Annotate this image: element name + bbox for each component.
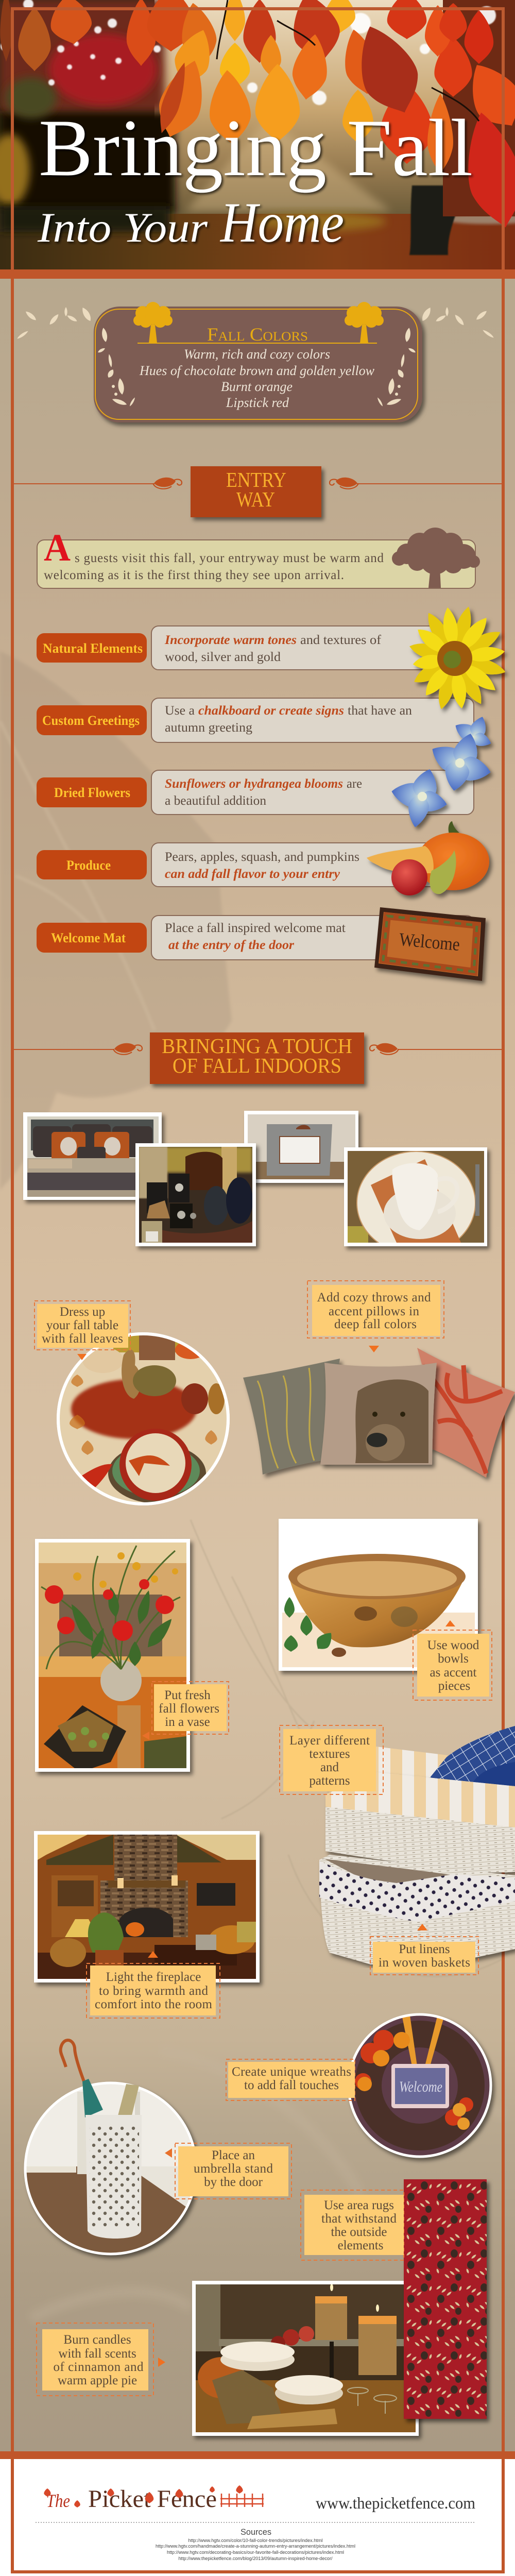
row: natural elements: Incorporate warm tones — [164, 633, 297, 647]
callout: area rugs: that withstand — [321, 2212, 397, 2226]
callout: fresh fall flowers — [142, 1682, 229, 1740]
photo: throw pillows — [243, 1348, 515, 1478]
row: natural elements: wood, silver and gold — [165, 650, 281, 664]
logo: The — [46, 2490, 70, 2511]
icon: welcome mat — [374, 907, 486, 981]
panel text: Lipstick red — [226, 395, 289, 410]
title: Bringing Fall — [39, 103, 473, 193]
panel text: Burnt orange — [221, 379, 293, 394]
photo: fall table setting — [57, 1332, 230, 1505]
row: dried flowers — [37, 770, 474, 815]
photo: area rug — [404, 2179, 487, 2419]
hero background: sunlit clearing — [0, 0, 515, 269]
icon: pumpkin, squash, apple, pear — [367, 821, 489, 895]
photo: mug on plate — [344, 1147, 487, 1255]
callout: umbrella stand: by the door — [204, 2175, 263, 2189]
callout: candles: Burn candles — [63, 2333, 131, 2347]
section heading: bringing a touch of fall indoors — [14, 1032, 502, 1084]
callout: cozy throws and pillows: accent pillows in — [329, 1304, 419, 1318]
callout: layer textures: and — [320, 1760, 339, 1774]
intro text box — [37, 527, 480, 588]
row: produce: Produce — [66, 858, 111, 873]
panel text: Warm, rich and cozy colors — [184, 347, 330, 362]
cream leaf garland — [16, 306, 494, 340]
umbrella and stand — [61, 2040, 142, 2239]
row: dried flowers: Dried Flowers — [54, 785, 130, 800]
top basket — [325, 1772, 515, 1872]
icon: brown oak tree — [392, 528, 480, 588]
callout: wood bowls: bowls — [438, 1652, 469, 1666]
callout: area rugs: elements — [338, 2239, 383, 2252]
callout: layer textures: Layer different — [289, 1734, 370, 1748]
callout: wood bowls: Use wood — [427, 1638, 479, 1652]
panel text — [139, 347, 375, 410]
section heading: bringing a touch of fall indoors: BRINGING A TOUCH — [162, 1034, 352, 1058]
callout: dress up your fall table — [35, 1301, 130, 1360]
bottom basket — [319, 1855, 515, 1964]
callout: wood bowls — [413, 1620, 492, 1700]
photo: woven baskets with linens — [319, 1726, 515, 1964]
row: welcome mat: Place a fall inspired welcome mat — [165, 921, 346, 935]
sources — [156, 2527, 355, 2562]
section heading: entry way — [14, 466, 502, 517]
row: dried flowers: a beautiful addition — [165, 794, 267, 808]
callout: cozy throws and pillows — [307, 1281, 444, 1352]
row: custom greetings: chalkboard or create signs — [198, 704, 344, 718]
callout: fresh fall flowers: fall flowers — [159, 1702, 219, 1716]
row: produce: Pears, apples, squash, and pumpkins — [165, 850, 359, 864]
intro text box: welcoming as it is the first thing they see upon arrival. — [44, 568, 344, 582]
callout: area rugs — [301, 2190, 404, 2260]
sources: http://www.hgtv.com/decorating-basics/our-favorite-fall-decorations/pictures/index.html — [167, 2550, 344, 2555]
callout: layer textures: textures — [309, 1747, 350, 1761]
cream leaves inside panel — [97, 327, 416, 407]
icon: golden tree left — [133, 302, 173, 343]
callout: layer textures: patterns — [309, 1774, 350, 1788]
icon: golden tree right — [345, 302, 384, 343]
callout: umbrella stand — [165, 2143, 291, 2199]
section heading: entry way: WAY — [236, 487, 275, 511]
callout: light the fireplace: Light the fireplace — [106, 1970, 201, 1984]
sources: http://www.hgtv.com/color/10-fall-color-trends/pictures/index.html — [188, 2538, 322, 2544]
panel: fall colors — [16, 302, 494, 422]
sources: http://www.thepicketfence.com/blog/2013/09/autumn-inspired-home-decor/ — [178, 2556, 333, 2562]
icon: sunflower — [408, 605, 507, 711]
callout: dress up your fall table: Dress up — [60, 1305, 105, 1319]
logo: Picket Fence — [88, 2485, 217, 2513]
hero branches — [217, 0, 479, 121]
logo — [44, 2485, 264, 2513]
section heading: bringing a touch of fall indoors: OF FALL INDOORS — [173, 1054, 341, 1077]
sources: http://www.hgtv.com/handmade/create-a-stunning-autumn-entry-arrangement/pictures/index.html — [156, 2544, 355, 2549]
callout: unique wreaths — [226, 2059, 355, 2100]
title — [37, 118, 474, 245]
callout: umbrella stand: umbrella stand — [194, 2162, 273, 2176]
callout: linens in baskets: Put linens — [399, 1942, 450, 1956]
callout: wood bowls: pieces — [438, 1679, 470, 1693]
photo: candles and plates — [192, 2281, 419, 2436]
footer — [0, 2451, 515, 2573]
row: custom greetings: Use a — [165, 704, 195, 718]
hero photo: autumn leaves — [0, 0, 515, 269]
row: custom greetings: that have an — [348, 704, 413, 718]
title: Into Your — [37, 204, 208, 251]
photo: bedroom with antler pillows — [23, 1112, 162, 1200]
callout: candles: warm apple pie — [58, 2374, 137, 2387]
row: custom greetings — [37, 698, 474, 742]
row: custom greetings: autumn greeting — [165, 721, 253, 735]
row: produce — [37, 843, 474, 887]
hero leaves — [0, 0, 515, 233]
photo: umbrella stand — [24, 2040, 200, 2257]
photo: frame on table — [244, 1111, 358, 1183]
title: Home — [219, 191, 344, 254]
row: custom greetings: Custom Greetings — [42, 713, 140, 728]
callout: fresh fall flowers: in a vase — [165, 1715, 210, 1729]
callout: umbrella stand: Place an — [212, 2148, 255, 2162]
callout: area rugs: the outside — [331, 2225, 387, 2239]
striped back lining — [376, 1747, 448, 1777]
callout: wood bowls: as accent — [430, 1666, 477, 1680]
photo: wooden bowl — [279, 1519, 478, 1671]
callout: light the fireplace: to bring warmth and — [99, 1984, 208, 1998]
callout: area rugs: Use area rugs — [324, 2198, 394, 2212]
callout: unique wreaths: to add fall touches — [244, 2078, 339, 2092]
callout: light the fireplace: comfort into the room — [95, 1997, 213, 2011]
row: dried flowers: are — [347, 777, 362, 791]
callout: candles: of cinnamon and — [54, 2360, 144, 2374]
callout: dress up your fall table: with fall leaves — [42, 1332, 123, 1346]
website: www.thepicketfence.com — [316, 2494, 475, 2512]
callout: dress up your fall table: your fall table — [46, 1318, 118, 1332]
callout: fresh fall flowers: Put fresh — [164, 1688, 211, 1702]
panel heading: Fall Colors — [207, 324, 308, 345]
icon: welcome mat: Welcome — [399, 929, 461, 955]
blue throw — [429, 1726, 515, 1788]
callout: candles: with fall scents — [58, 2347, 136, 2361]
row: produce: can add fall flavor to your entry — [165, 867, 340, 881]
callout: linens in baskets — [370, 1924, 478, 1975]
section heading: entry way: ENTRY — [226, 468, 286, 492]
photo: fireplace room — [34, 1831, 260, 1982]
callout: cozy throws and pillows: deep fall colors — [334, 1317, 417, 1331]
callout: cozy throws and pillows: Add cozy throws and — [317, 1291, 431, 1304]
photo: ravens and skull glasses — [135, 1143, 256, 1246]
callout: light the fireplace — [87, 1951, 220, 2018]
photo: wreath with welcome sign: Welcome — [399, 2078, 442, 2095]
row: welcome mat: at the entry of the door — [168, 938, 294, 952]
callout: linens in baskets: in woven baskets — [379, 1956, 470, 1970]
photo: wreath with welcome sign — [345, 2009, 494, 2164]
sources: Sources — [241, 2527, 271, 2537]
row: natural elements — [37, 626, 474, 670]
hero bokeh highlights — [1, 0, 496, 105]
row: natural elements: and textures of — [300, 633, 382, 647]
callout: unique wreaths: Create unique wreaths — [232, 2065, 351, 2079]
icon: hydrangea blooms — [389, 714, 493, 829]
callout: candles — [37, 2323, 165, 2396]
intro text box: A — [44, 527, 71, 569]
callout: layer textures — [280, 1725, 383, 1794]
intro text box: s guests visit this fall, your entryway must be warm and — [75, 551, 384, 565]
hero top and side frame — [11, 7, 505, 269]
row: welcome mat — [37, 916, 474, 960]
row: natural elements: Natural Elements — [43, 641, 143, 656]
row: dried flowers: Sunflowers or hydrangea blooms — [165, 777, 343, 791]
panel text: Hues of chocolate brown and golden yellow — [139, 363, 375, 378]
row: welcome mat: Welcome Mat — [51, 930, 126, 945]
photo: fresh flowers in vase — [35, 1539, 190, 1772]
